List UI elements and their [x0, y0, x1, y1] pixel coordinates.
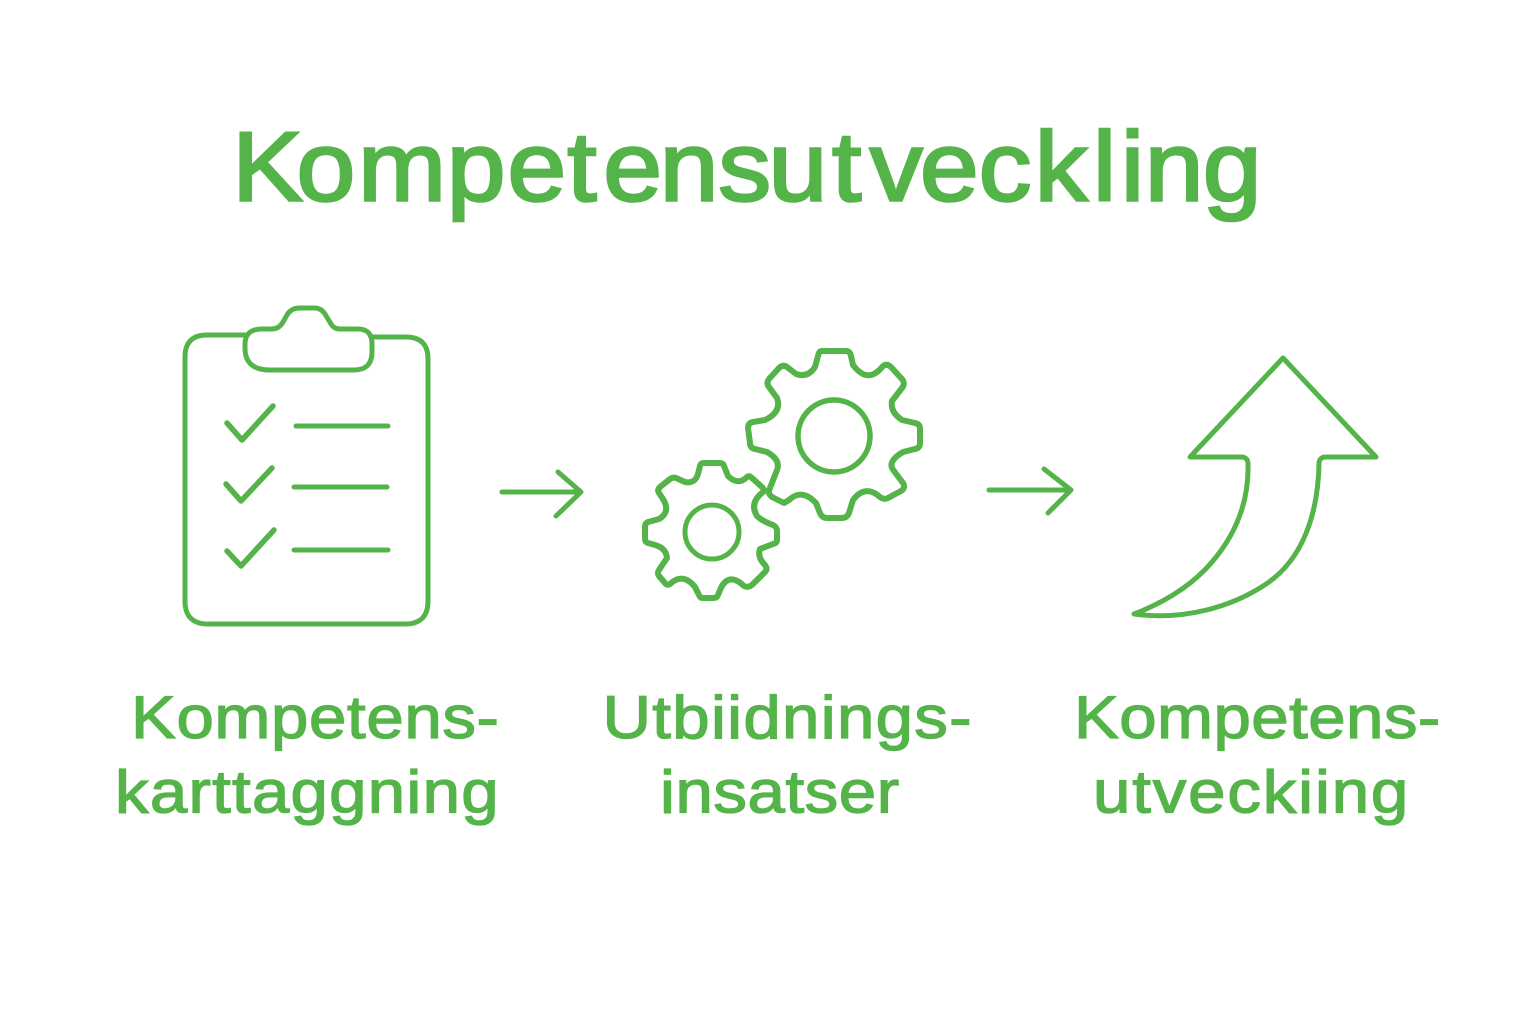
icon: large gear: [748, 351, 920, 518]
icon: curved up arrow: [1134, 358, 1376, 616]
label: Utbildningsinsatser: [602, 684, 972, 826]
icon: small gear: [645, 463, 777, 598]
label: Kompetens-karttaggning: Kompetens-: [131, 684, 499, 751]
arrow: step one to step two: [502, 472, 581, 516]
title: Kompetensutveckling: [232, 112, 1262, 222]
icon: clipboard with checklist: [185, 308, 428, 624]
label: Kompetens-karttaggning: [115, 684, 499, 826]
label: Kompetensutveckling: utveckiing: [1093, 759, 1408, 826]
label: Utbildningsinsatser: Utbiidnings-: [602, 684, 972, 751]
label: Kompetens-karttaggning: karttaggning: [115, 759, 499, 826]
label: Kompetensutveckling: Kompetens-: [1074, 684, 1440, 751]
label: Kompetensutveckling: [1074, 684, 1440, 826]
arrow: step two to step three: [989, 469, 1071, 513]
label: Utbildningsinsatser: insatser: [660, 759, 899, 826]
